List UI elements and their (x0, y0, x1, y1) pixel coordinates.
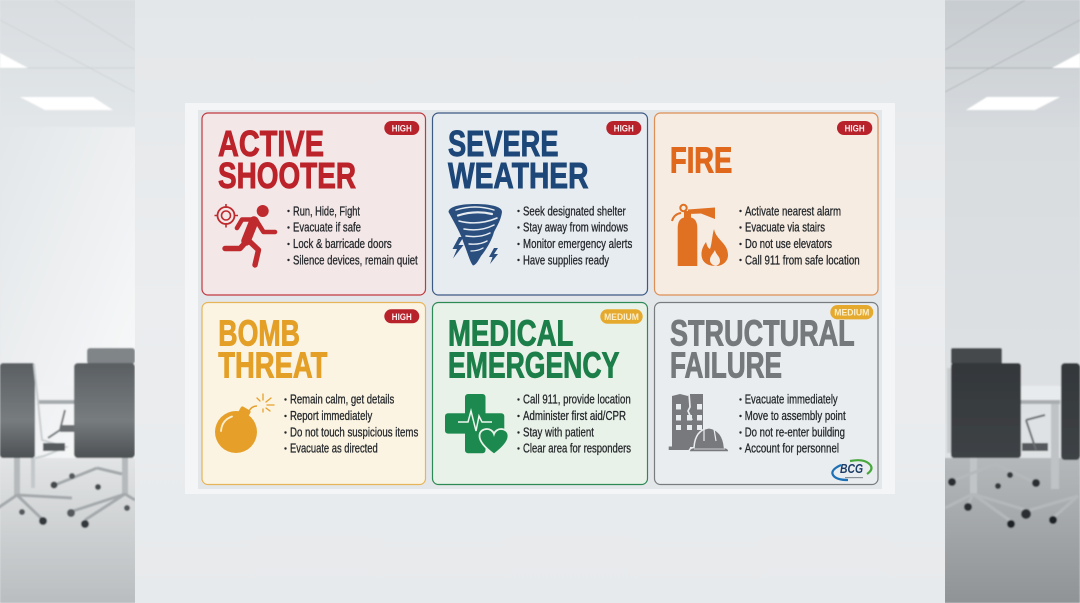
icon: medical cross with heart (445, 394, 508, 454)
heading (670, 313, 855, 385)
list: Stay away from windows (523, 221, 628, 235)
list: Have supplies ready (523, 253, 610, 267)
card (432, 113, 648, 295)
list: Do not use elevators (745, 237, 832, 251)
panel: active shooter (202, 113, 426, 295)
icon: damaged building and hard hat (669, 393, 729, 452)
list (287, 204, 418, 267)
list: Do not re-enter building (745, 426, 845, 440)
heading: EMERGENCY (448, 344, 619, 385)
heading: WEATHER (448, 155, 588, 196)
panel: structural failure (654, 302, 878, 484)
list: Call 911 from safe location (745, 253, 860, 267)
icon: target and running person (214, 204, 275, 265)
list: Account for personnel (745, 442, 839, 456)
list: Evacuate if safe (293, 221, 361, 235)
list: Activate nearest alarm (745, 204, 841, 218)
list: Remain calm, get details (290, 392, 394, 406)
card (202, 302, 426, 484)
heading: THREAT (218, 344, 327, 385)
list: Evacuate as directed (290, 442, 378, 456)
list (517, 392, 631, 456)
badge: high: HIGH (392, 312, 412, 323)
list: Seek designated shelter (523, 204, 626, 218)
heading: FIRE (670, 139, 732, 180)
list (739, 204, 860, 267)
heading (448, 313, 619, 385)
center wall (135, 0, 945, 603)
list: Do not touch suspicious items (290, 426, 418, 440)
icon: bomb (215, 394, 274, 453)
heading: STRUCTURAL (670, 313, 855, 354)
panel: fire (654, 113, 878, 295)
right room photo (944, 0, 1080, 603)
icon: tornado (448, 204, 502, 266)
icon: fire extinguisher and flame (672, 205, 728, 266)
badge: high (606, 121, 641, 135)
badge: medium: MEDIUM (834, 308, 869, 319)
list: Monitor emergency alerts (523, 237, 632, 251)
card (654, 113, 878, 295)
heading: BOMB (218, 313, 300, 354)
heading: SEVERE (448, 123, 558, 164)
list: Report immediately (290, 409, 373, 423)
card (432, 302, 648, 484)
list (739, 392, 846, 456)
badge: medium (600, 309, 643, 324)
list: Clear area for responders (523, 442, 631, 456)
list: Lock & barricade doors (293, 237, 392, 251)
badge: high: HIGH (614, 124, 634, 134)
list: Administer first aid/CPR (523, 409, 626, 423)
badge: high (837, 121, 872, 135)
badge: high (384, 121, 419, 135)
list: Move to assembly point (745, 409, 846, 423)
list (517, 204, 632, 267)
badge: high (384, 309, 419, 323)
heading: SHOOTER (218, 155, 356, 196)
panel: bomb threat (202, 302, 426, 484)
list (284, 392, 418, 456)
list: Silence devices, remain quiet (293, 253, 418, 267)
badge: high: HIGH (392, 124, 412, 134)
logo: BCG: BCG (840, 462, 863, 476)
list: Call 911, provide location (523, 392, 631, 406)
badge: medium (830, 305, 873, 319)
list: Run, Hide, Fight (293, 204, 360, 218)
heading (448, 123, 588, 196)
heading: MEDICAL (448, 313, 573, 354)
badge: high: HIGH (845, 124, 865, 134)
heading: FAILURE (670, 344, 782, 385)
board frame (185, 103, 895, 494)
panel: severe weather (432, 113, 648, 295)
card (202, 113, 426, 295)
logo: BCG (832, 460, 872, 480)
badge: medium: MEDIUM (604, 312, 639, 323)
card (654, 302, 878, 484)
list: Evacuate via stairs (745, 221, 825, 235)
emergency procedures board (185, 103, 895, 494)
left room photo (0, 0, 136, 603)
heading (218, 313, 327, 385)
list: Evacuate immediately (745, 392, 838, 406)
heading: ACTIVE (218, 123, 324, 164)
list: Stay with patient (523, 426, 594, 440)
panel: medical emergency (432, 302, 648, 484)
heading (218, 123, 356, 196)
